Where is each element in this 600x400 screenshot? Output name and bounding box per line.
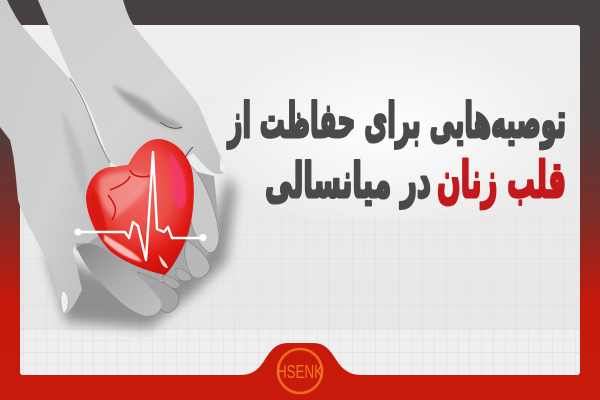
chart: ECG line bbox=[74, 152, 207, 260]
icon: long finger bbox=[77, 244, 161, 316]
title bbox=[227, 93, 566, 209]
lower hand shading bbox=[62, 110, 89, 205]
logo: HSENK: HSENK bbox=[277, 362, 323, 382]
palm crease of upper hand bbox=[112, 84, 183, 128]
crease between forearms bbox=[70, 78, 110, 163]
shadow under hands bbox=[45, 175, 236, 328]
title line 2: dark: در میانسالی bbox=[265, 153, 431, 209]
icon: lower hand bbox=[0, 0, 112, 313]
icon: heart bbox=[86, 139, 194, 275]
crease between thumb and palm bbox=[160, 122, 193, 160]
nail of upper hand bbox=[220, 158, 226, 172]
logo: HSENK bbox=[277, 349, 323, 393]
thumbnail bbox=[61, 291, 68, 313]
illustration: hands holding heart bbox=[0, 0, 236, 328]
icon: upper hand bbox=[38, 0, 226, 174]
palm behind heart bbox=[70, 170, 220, 280]
icon: rear fingers bbox=[138, 165, 219, 313]
logo tab bbox=[240, 343, 362, 400]
